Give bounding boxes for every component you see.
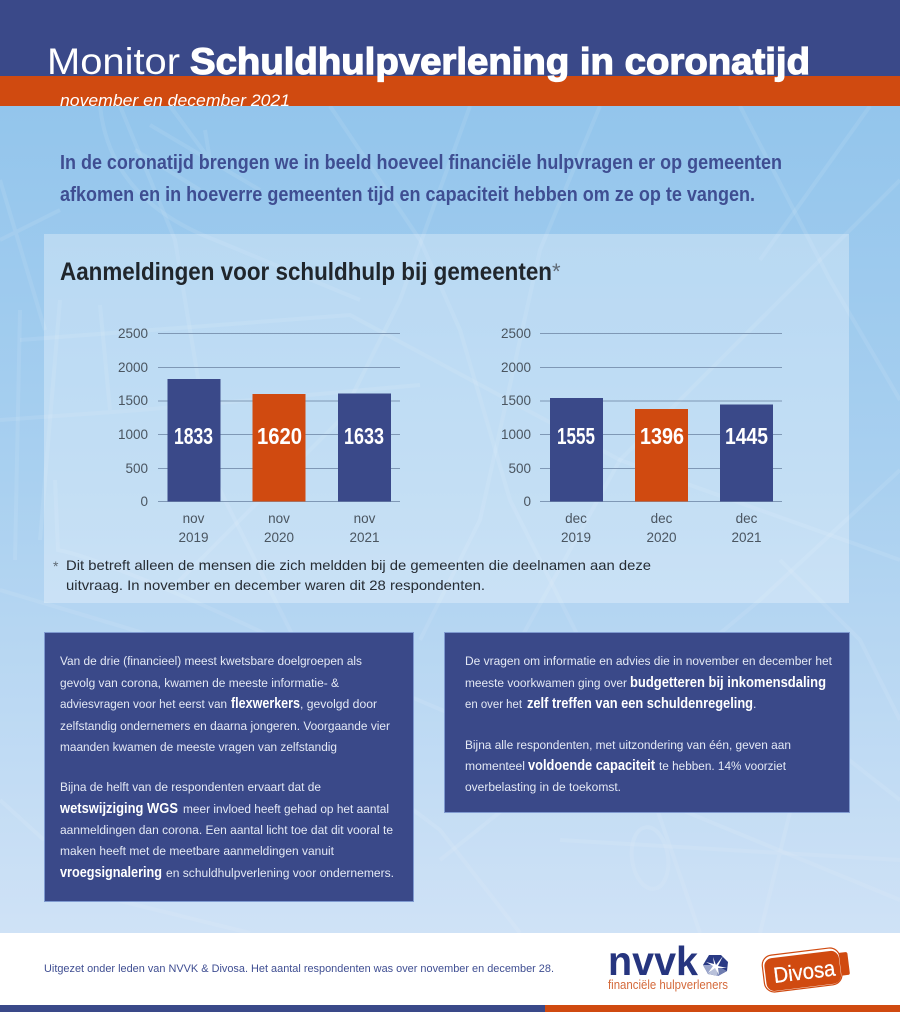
paragraph: kwetsbare doelgroepen: gevolg van corona, kwamen de meeste informatie- & [60,676,340,690]
paragraph: capaciteit: te hebben. 14% voorziet [659,759,787,773]
bar: nov 2019: nov [183,511,205,526]
bar chart: november: 1500 [118,393,148,408]
bar chart: november: 2500 [118,326,148,341]
title: Monitor [47,41,180,82]
bar: nov 2021: 2021 [349,530,380,545]
bar: nov 2020: 1620 [257,423,302,449]
logo: Divosa: Divosa [772,955,837,988]
panel: doelgroepen text [44,632,414,902]
bar: nov 2021: 1633 [344,423,384,449]
panel: aanmeldingen charts [44,234,849,603]
chart heading: * [552,259,561,284]
bar chart: november: 500 [125,461,148,476]
paragraph: wetswijziging WGS: vroegsignalering [60,865,162,881]
paragraph: vragen informatie en advies: en over het [465,697,523,711]
intro text: In de coronatijd brengen we in beeld hoeveel financiële hulpvragen er op gemeenten [60,152,782,174]
bar: dec 2020: 1396 [640,423,684,449]
paragraph: kwetsbare doelgroepen: Van de drie (financieel) meest kwetsbare doelgroepen als [60,654,362,668]
paragraph: kwetsbare doelgroepen: , gevolgd door [300,697,377,711]
bar chart: november: 0 [140,494,148,509]
bar chart: december: 500 [508,461,531,476]
bar chart: december [501,326,782,545]
bar chart: november: 2000 [118,360,148,375]
paragraph: capaciteit: momenteel [465,759,525,773]
footer [0,933,900,1012]
footnote: * [53,558,59,574]
paragraph: vragen informatie en advies: meeste voorkwamen ging over [465,676,627,690]
title: Schuldhulpverlening in coronatijd [190,41,810,82]
footnote: uitvraag. In november en december waren dit 28 respondenten. [66,577,485,593]
intro text: afkomen en in hoeverre gemeenten tijd en capaciteit hebben om ze op te vangen. [60,184,755,206]
bar chart: december: 1000 [501,427,531,442]
footnote [53,557,651,593]
logo: Divosa [761,946,851,993]
logo: NVVK: nvvk [608,938,698,984]
intro text [60,152,782,206]
bar: dec 2021: 2021 [731,530,762,545]
paragraph: kwetsbare doelgroepen: maanden kwamen de meeste vragen van zelfstandig [60,740,337,754]
paragraph: vragen informatie en advies: budgetteren bij inkomensdaling [630,675,826,691]
bar: nov 2021: nov [354,511,376,526]
bar: dec 2021: dec [736,511,758,526]
bar chart: december: 1500 [501,393,531,408]
bar: dec 2021: 1445 [725,423,768,449]
paragraph: wetswijziging WGS: Bijna de helft van de respondenten ervaart dat de [60,780,321,794]
bar: dec 2019: 2019 [561,530,591,545]
paragraph: wetswijziging WGS: meer invloed heeft gehad op het aantal [183,802,389,816]
bar: nov 2020: 2020 [264,530,294,545]
bar: dec 2021 [720,404,773,545]
paragraph: kwetsbare doelgroepen: zelfstandig ondernemers en daarna jongeren. Voorgaande vier [60,719,390,733]
paragraph: wetswijziging WGS: en schuldhulpverlening voor ondernemers. [166,866,394,880]
bar: nov 2019 [168,379,220,545]
panel: informatie en capaciteit text [444,632,850,812]
paragraph: wetswijziging WGS: aanmeldingen dan corona. Een aantal licht toe dat dit vooral te [60,823,393,837]
paragraph: wetswijziging WGS: wetswijziging WGS [59,801,178,817]
footnote: Dit betreft alleen de mensen die zich meldden bij de gemeenten die deelnamen aan deze [66,557,651,573]
footer note: Uitgezet onder leden van NVVK & Divosa. Het aantal respondenten was over november en december 28. [44,963,554,975]
bar: nov 2019: 1833 [174,423,213,449]
chart heading: Aanmeldingen voor schuldhulp bij gemeenten [60,258,552,286]
paragraph: kwetsbare doelgroepen: adviesvragen voor het eerst van [60,697,227,711]
paragraph: wetswijziging WGS [59,780,394,881]
bar: nov 2020 [252,394,306,545]
bar: dec 2020: 2020 [646,530,677,545]
bar: dec 2019: 1555 [557,423,595,449]
bar: nov 2021 [338,394,391,545]
bar: nov 2020: nov [268,511,290,526]
paragraph: capaciteit: Bijna alle respondenten, met uitzondering van één, geven aan [465,738,791,752]
paragraph: capaciteit: overbelasting in de toekomst. [465,780,621,794]
paragraph: kwetsbare doelgroepen: flexwerkers [231,696,300,712]
paragraph: capaciteit [465,738,791,794]
logo: NVVK [608,938,728,992]
bar: dec 2019 [550,398,603,545]
bar: dec 2020: dec [651,511,673,526]
paragraph: vragen informatie en advies: . [753,697,756,711]
bar chart: november: 1000 [118,427,148,442]
bar chart: december: 0 [523,494,531,509]
bar: dec 2019: dec [565,511,587,526]
bar chart: december: 2000 [501,360,531,375]
bar: dec 2020 [635,409,688,545]
bar: nov 2019: 2019 [178,530,209,545]
header band [0,0,900,110]
paragraph: vragen informatie en advies: zelf treffen van een schuldenregeling [527,696,753,712]
bar chart: december: 2500 [501,326,531,341]
paragraph: wetswijziging WGS: maken heeft met de meetbare aanmeldingen vanuit [60,844,335,858]
subtitle: november en december 2021 [60,91,290,110]
paragraph: kwetsbare doelgroepen [60,654,390,754]
bar chart: november [118,326,400,545]
logo: NVVK: financiële hulpverleners [608,978,728,992]
paragraph: vragen informatie en advies: De vragen om informatie en advies die in november en december het [465,654,833,668]
paragraph: vragen informatie en advies [465,654,833,712]
paragraph: capaciteit: voldoende capaciteit [528,758,655,774]
